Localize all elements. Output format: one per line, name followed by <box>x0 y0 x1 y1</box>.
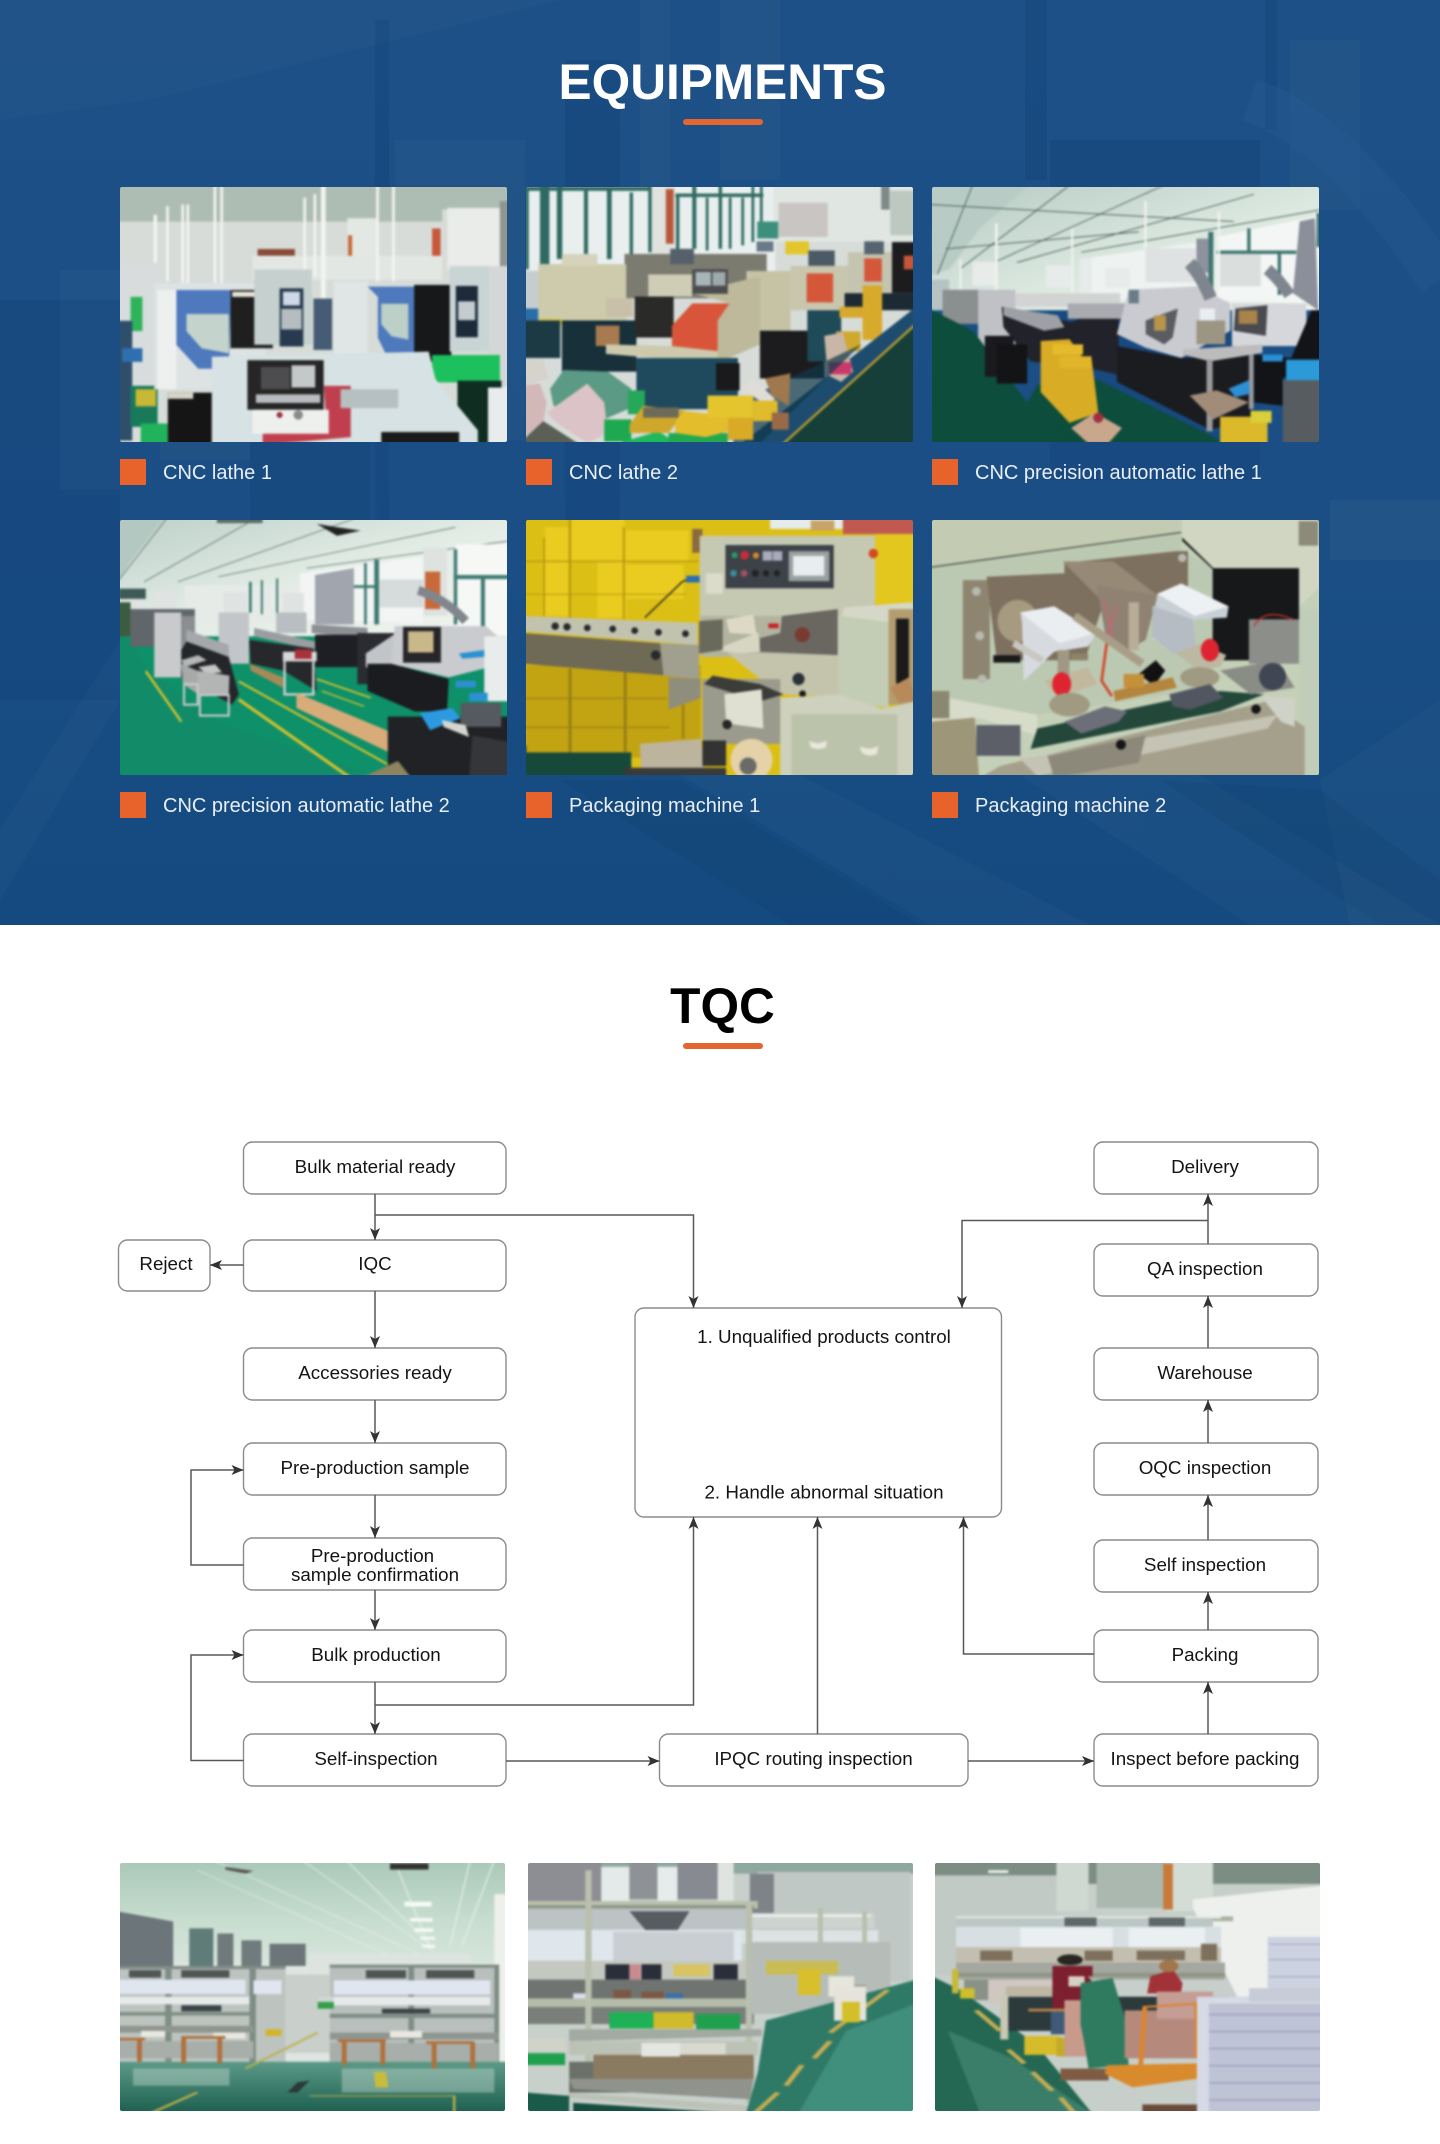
box: Bulk production: Bulk production <box>311 1644 441 1665</box>
box: control centre: 1. Unqualified products control <box>697 1326 951 1347</box>
arrow: confirmation to bulk production <box>374 1590 376 1630</box>
swatch <box>120 459 146 485</box>
arrow: QA to control centre <box>962 1220 1208 1308</box>
arrow: IPQC to control centre <box>816 1517 818 1734</box>
heading: TQC: TQC <box>670 978 775 1034</box>
arrow: self inspection to OQC <box>1207 1495 1209 1540</box>
arrow: IPQC to inspect before packing <box>968 1760 1094 1762</box>
box: Bulk material ready: Bulk material ready <box>295 1156 456 1177</box>
arrow: packing to self inspection <box>1207 1592 1209 1630</box>
box: Warehouse: Warehouse <box>1157 1362 1253 1383</box>
heading underline <box>683 119 763 125</box>
heading: EQUIPMENTS: EQUIPMENTS <box>559 54 886 110</box>
box: OQC inspection <box>1094 1443 1318 1495</box>
label: CNC precision automatic lathe 2: CNC precision automatic lathe 2 <box>163 795 450 817</box>
photo: Packaging machine 2 <box>932 520 1319 775</box>
box: Inspect before packing <box>1094 1734 1318 1786</box>
photo: CNC lathe 1 <box>120 187 507 442</box>
heading underline <box>683 1043 763 1049</box>
arrow: QA to delivery <box>1207 1194 1209 1244</box>
arrow: warehouse to QA <box>1207 1296 1209 1348</box>
swatch <box>932 792 958 818</box>
box: control centre <box>635 1308 1002 1517</box>
swatch <box>932 459 958 485</box>
photo: workstation close-up <box>528 1863 913 2111</box>
box: IPQC routing inspection: IPQC routing inspection <box>714 1748 913 1769</box>
box: QA inspection: QA inspection <box>1147 1258 1263 1279</box>
photo: CNC precision automatic lathe 2 <box>120 520 507 775</box>
photo: Packaging machine 1 <box>526 520 913 775</box>
box: control centre: 2. Handle abnormal situation <box>704 1482 944 1502</box>
arrow: IQC to accessories <box>374 1291 376 1348</box>
label: CNC lathe 1: CNC lathe 1 <box>163 462 272 484</box>
label: CNC precision automatic lathe 1: CNC precision automatic lathe 1 <box>975 462 1262 484</box>
flowchart: TQC process <box>118 1141 1319 1787</box>
photo: CNC precision automatic lathe 1 <box>932 187 1319 442</box>
faded factory background <box>0 0 1440 925</box>
box: Accessories ready <box>244 1348 506 1400</box>
box: Self inspection: Self inspection <box>1144 1554 1266 1575</box>
label: Packaging machine 1: Packaging machine 1 <box>569 795 760 817</box>
box: Bulk production <box>244 1630 506 1682</box>
swatch <box>120 792 146 818</box>
box: Reject: Reject <box>139 1253 193 1274</box>
arrow: confirmation back to sample <box>191 1470 244 1565</box>
box: Pre-production sample confirmation: sample confirmation <box>291 1564 459 1585</box>
box: Pre-production sample confirmation <box>244 1538 506 1590</box>
box: QA inspection <box>1094 1244 1318 1296</box>
box: Self inspection <box>1094 1540 1318 1592</box>
arrow: bulk production to control centre <box>375 1517 694 1705</box>
box: Delivery: Delivery <box>1171 1156 1240 1177</box>
arrow: IQC to Reject <box>210 1264 244 1266</box>
box: Pre-production sample <box>244 1443 506 1495</box>
label: Packaging machine 2: Packaging machine 2 <box>975 795 1166 817</box>
arrow: self-inspection back to bulk production <box>191 1655 244 1760</box>
box: Bulk material ready <box>244 1142 506 1194</box>
box: IQC: IQC <box>358 1253 392 1274</box>
photo: workshop bench rows <box>120 1863 505 2111</box>
arrow: OQC to warehouse <box>1207 1400 1209 1443</box>
arrow: accessories to sample <box>374 1400 376 1443</box>
arrow: bulk material to IQC <box>374 1194 376 1240</box>
box: Pre-production sample confirmation: Pre-production <box>311 1545 434 1566</box>
photo: packing workers <box>935 1863 1320 2111</box>
box: IPQC routing inspection <box>660 1734 968 1786</box>
label: CNC lathe 2: CNC lathe 2 <box>569 462 678 484</box>
box: Inspect before packing: Inspect before packing <box>1111 1748 1299 1769</box>
box: OQC inspection: OQC inspection <box>1139 1457 1271 1478</box>
box: Delivery <box>1094 1142 1318 1194</box>
box: Accessories ready: Accessories ready <box>298 1362 452 1383</box>
panel: equipments section <box>0 0 1440 925</box>
box: Warehouse <box>1094 1348 1318 1400</box>
arrow: self-inspection to IPQC <box>506 1760 660 1762</box>
photo: CNC lathe 2 <box>526 187 913 442</box>
swatch <box>526 792 552 818</box>
box: IQC <box>244 1240 506 1291</box>
box: Reject <box>118 1240 210 1291</box>
arrow: bulk material to control centre <box>375 1215 694 1308</box>
box: Pre-production sample: Pre-production sample <box>281 1457 469 1478</box>
swatch <box>526 459 552 485</box>
box: Packing <box>1094 1630 1318 1682</box>
arrow: sample to confirmation <box>374 1495 376 1538</box>
arrow: inspect to packing <box>1207 1682 1209 1734</box>
box: Packing: Packing <box>1172 1644 1238 1665</box>
box: Self-inspection: Self-inspection <box>314 1748 438 1769</box>
box: Self-inspection <box>244 1734 506 1786</box>
arrow: packing to control centre <box>964 1517 1094 1654</box>
arrow: bulk production to self-inspection <box>374 1682 376 1734</box>
